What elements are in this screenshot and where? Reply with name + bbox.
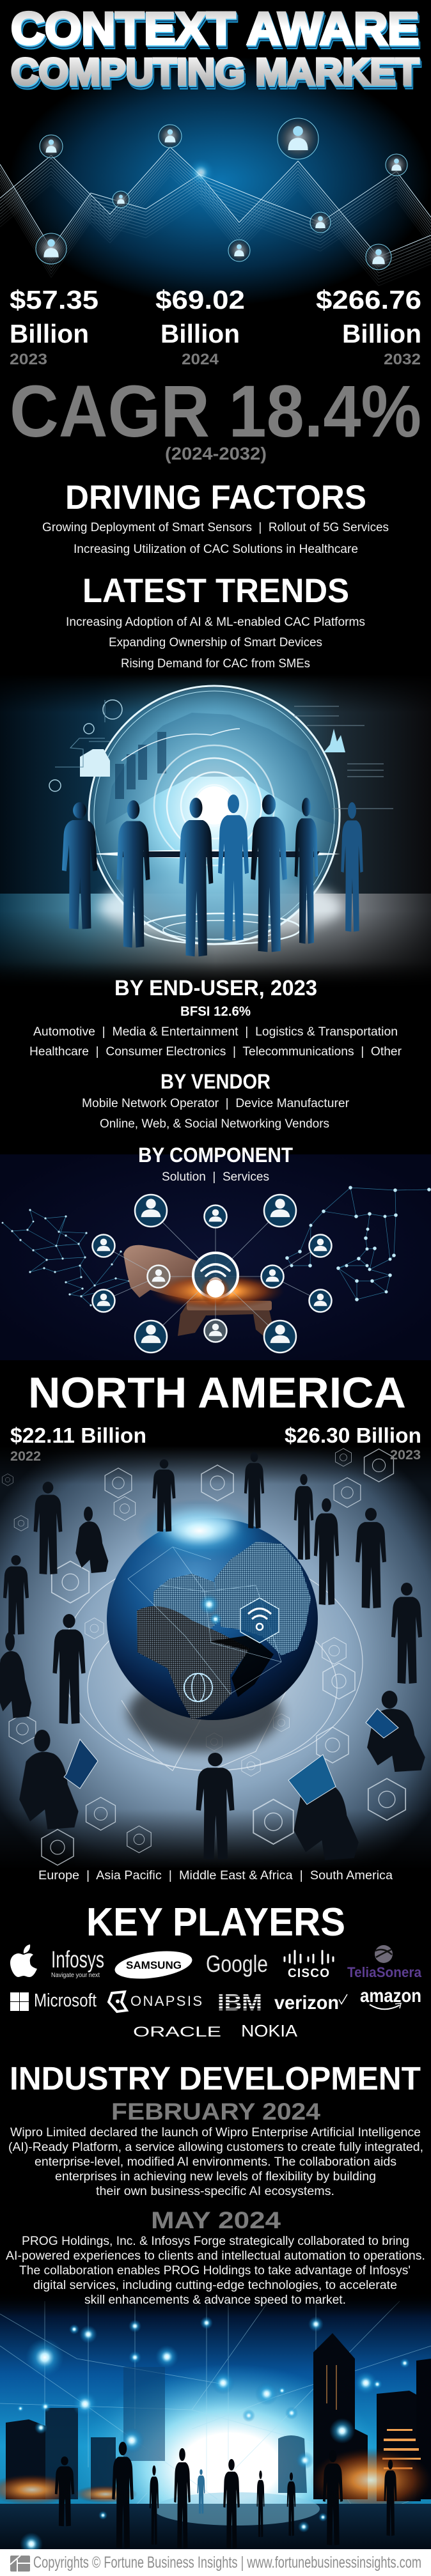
text: February 2024 development: Wipro Limited declared the launch of Wipro Enterprise Artificial Intelligence (10, 2126, 421, 2139)
network lines (0, 2301, 431, 2549)
text: end-user segments: Automotive | Media & Entertainment | Logistics & Transportation (33, 1025, 398, 1039)
stat: 2024 market size: $69.02 (155, 285, 245, 314)
stat: North America 2023 (285, 1424, 421, 1463)
ribbon lines (0, 150, 431, 286)
text: vendor segments: Mobile Network Operator | Device Manufacturer (82, 1097, 350, 1110)
logo: Microsoft (10, 1990, 97, 2011)
main network lines (0, 147, 431, 257)
wifi badge (240, 1598, 279, 1643)
text: driving factor list (42, 521, 389, 556)
text: February 2024 development (8, 2126, 423, 2198)
logo: IBM: IBM (217, 1989, 262, 2015)
glowing network nodes (17, 2316, 410, 2556)
logo: Infosys (51, 1946, 104, 1979)
stat: 2032 market size (316, 285, 421, 368)
logo: Infosys: Infosys (51, 1946, 104, 1973)
text: end-user segments (29, 1025, 402, 1059)
central wifi node (193, 1253, 238, 1307)
logo: Samsung (113, 1947, 194, 1983)
floor ring (141, 913, 301, 944)
holographic sphere (89, 686, 340, 944)
logo: Oracle: ORACLE (133, 2024, 221, 2040)
text: other regions: Europe | Asia Pacific | Middle East & Africa | South America (38, 1869, 393, 1882)
icon: Fortune Business Insights logo (10, 2556, 30, 2572)
text: latest trends list: Expanding Ownership of Smart Devices (109, 636, 322, 649)
text: driving factor list: Growing Deployment of Smart Sensors | Rollout of 5G Services (42, 521, 389, 534)
logo: TeliaSonera (347, 1945, 422, 1980)
stat: 2032 market size: Billion (342, 319, 421, 348)
text: latest trends list: Rising Demand for CAC from SMEs (121, 657, 310, 671)
footer (0, 2549, 431, 2576)
heading: by vendor: BY VENDOR (161, 1070, 270, 1093)
logo: Cisco: CISCO (288, 1967, 329, 1980)
logo: Microsoft: Microsoft (34, 1990, 97, 2011)
logo: Samsung: SAMSUNG (126, 1959, 182, 1971)
logo: Infosys: Navigate your next (51, 1971, 100, 1979)
text: May 2024 development: The collaboration enables PROG Holdings to take advantage of Infosys' (19, 2264, 411, 2277)
logo: Verizon: verizon (274, 1992, 339, 2013)
background buildings (6, 2333, 431, 2501)
conference table (91, 850, 340, 858)
text: May 2024 development: digital services, including cutting-edge technologies, to accelerate (33, 2279, 397, 2292)
user node circles (92, 1195, 331, 1353)
analyst silhouettes (0, 1452, 425, 1860)
CAGR figure: (2024-2032) (165, 444, 267, 463)
heading: by end-user: BY END-USER, 2023 (114, 976, 317, 1000)
central glow point (187, 159, 215, 187)
subheading: May 2024: MAY 2024 (151, 2207, 281, 2233)
logo: Google: Google (206, 1951, 268, 1977)
stat: BFSI share: BFSI 12.6% (180, 1004, 251, 1019)
logo: Cisco (285, 1951, 333, 1980)
orange street glow (0, 2448, 431, 2512)
stat: North America 2023: $26.30 Billion (285, 1424, 421, 1447)
stat: 2032 market size: 2032 (384, 351, 421, 368)
logo: Amazon: amazon (360, 1985, 421, 2006)
stat: 2023 market size: 2023 (10, 351, 47, 368)
logo: Onapsis: ONAPSIS (130, 1993, 202, 2009)
stat: North America 2022: $22.11 Billion (10, 1424, 146, 1447)
logos: key players (10, 1944, 422, 2040)
text: February 2024 development: enterprise-level, modified AI environments. The collaboration aids (35, 2155, 396, 2169)
stat: North America 2022 (10, 1424, 146, 1464)
text: May 2024 development: AI-powered experiences to clients and intellectual automation to operations. (6, 2249, 425, 2263)
text: May 2024 development (6, 2235, 425, 2307)
building lights (326, 2365, 421, 2469)
network nodes (36, 118, 407, 270)
hand on smartphone (123, 1245, 285, 1339)
top highlight (164, 1512, 235, 1540)
title: Context Aware Computing Market: COMPUTING MARKET (11, 51, 419, 93)
stat: North America 2022: 2022 (10, 1449, 41, 1464)
team silhouettes (62, 795, 363, 956)
subheading: February 2024: FEBRUARY 2024 (111, 2099, 320, 2125)
text: May 2024 development: skill enhancements & advance speed to market. (84, 2293, 346, 2307)
heading: latest trends: LATEST TRENDS (82, 572, 349, 610)
logo: Apple (10, 1944, 37, 1977)
stat: 2023 market size (10, 285, 98, 368)
text: driving factor list: Increasing Utilization of CAC Solutions in Healthcare (74, 543, 358, 556)
text: February 2024 development: (AI)-Ready Platform, a service allowing customers to create fully integrated, (8, 2141, 423, 2154)
panel: network hero illustration (0, 56, 431, 306)
logo: Onapsis (109, 1992, 202, 2012)
network lines on globe (128, 1547, 281, 1694)
logo: Nokia: NOKIA (241, 2021, 298, 2040)
stat: 2023 market size: $57.35 (10, 285, 98, 314)
heading: north america: NORTH AMERICA (28, 1369, 406, 1417)
side charts and icons (49, 700, 393, 809)
stat: 2023 market size: Billion (10, 319, 89, 348)
text: component segments: Solution | Services (162, 1170, 269, 1184)
floor hexagon icons (3, 1448, 405, 1865)
text: latest trends list (66, 616, 365, 671)
heading: key players: KEY PLAYERS (86, 1900, 345, 1944)
text: latest trends list: Increasing Adoption of AI & ML-enabled CAC Platforms (66, 616, 365, 629)
text: February 2024 development: their own business-specific AI ecosystems. (96, 2185, 334, 2198)
left constellation (2, 1209, 130, 1307)
circuit arcs on floor (62, 1553, 363, 1771)
text: vendor segments: Online, Web, & Social Networking Vendors (100, 1117, 329, 1131)
globe (107, 1499, 318, 1751)
text: February 2024 development: enterprises in achieving new levels of flexibility by building (55, 2170, 376, 2184)
text: vendor segments (82, 1097, 350, 1131)
logo: TeliaSonera: TeliaSonera (347, 1964, 422, 1980)
panel: connected users on smartphone (0, 1154, 431, 1360)
text: May 2024 development: PROG Holdings, Inc. & Infosys Forge strategically collaborated to bring (22, 2235, 409, 2248)
reflective ground (0, 2504, 431, 2549)
right constellation (285, 1186, 431, 1301)
continents (214, 1542, 311, 1656)
heading: industry development: INDUSTRY DEVELOPMENT (10, 2060, 421, 2097)
stat: 2024 market size (155, 285, 245, 368)
stat: 2024 market size: 2024 (182, 351, 219, 368)
stat: North America 2023: 2023 (390, 1448, 421, 1463)
title: Context Aware Computing Market (11, 4, 419, 93)
people silhouettes (55, 2442, 397, 2549)
stat: 2024 market size: Billion (161, 319, 240, 348)
panel: analysts around digital globe (0, 1446, 431, 1870)
laptops (64, 1709, 398, 1804)
heading: driving factors: DRIVING FACTORS (65, 479, 366, 516)
panel: city skyline with silhouettes (0, 2292, 431, 2568)
title: Context Aware Computing Market: CONTEXT AWARE (11, 4, 419, 54)
text: end-user segments: Healthcare | Consumer Electronics | Telecommunications | Other (29, 1045, 402, 1059)
stat: 2032 market size: $266.76 (316, 285, 421, 314)
panel: business team around holographic sphere (0, 674, 431, 989)
connector lines (103, 1211, 320, 1337)
heading: by component: BY COMPONENT (138, 1144, 293, 1167)
